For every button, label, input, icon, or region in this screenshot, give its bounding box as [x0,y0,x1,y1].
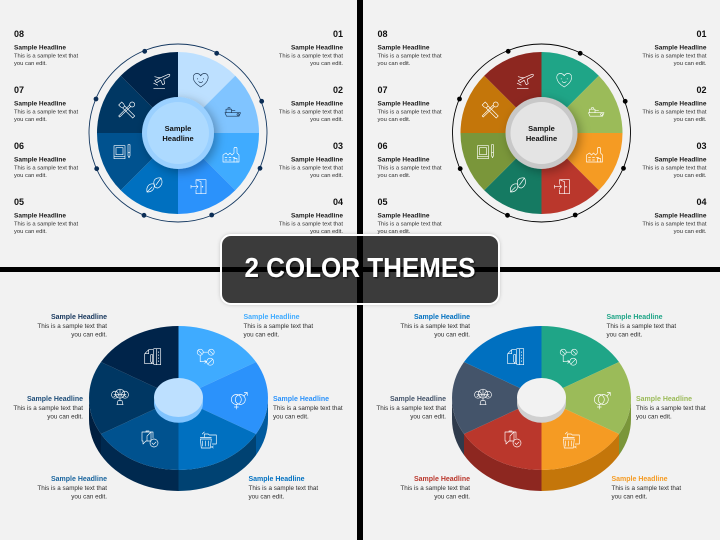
centre disc: Sample [165,124,191,133]
label top right: This is a sample text that [244,323,313,330]
item 03: Sample Headline [654,156,707,164]
item 02: you can edit. [674,117,707,123]
label middle right: Sample Headline [273,396,329,403]
centre disc [142,97,214,169]
item 04: you can edit. [674,229,707,235]
icon: factory [223,147,239,162]
raised hub [517,378,566,423]
icon: chat check [142,431,158,447]
outer ring with dots [89,44,267,222]
item 03: Sample Headline [291,156,343,164]
label top left: This is a sample text that [37,323,107,330]
icon: plane [154,74,170,89]
item 06: This is a sample text that [14,165,79,171]
centre disc: Headline [526,134,557,143]
item 05: you can edit. [378,229,411,235]
label middle left: Sample Headline [390,396,446,403]
item 01: Sample Headline [291,44,343,52]
horizontal divider [0,267,720,272]
item 04: you can edit. [310,229,343,235]
centre disc [506,97,578,169]
label top left: you can edit. [434,332,470,338]
label bottom right [612,476,681,500]
label middle right: you can edit. [636,414,672,420]
item 07: This is a sample text that [378,109,442,115]
label top left [37,314,107,338]
label middle left: you can edit. [410,414,446,420]
label bottom left [400,476,470,500]
label bottom left: Sample Headline [51,476,107,483]
item 02: 02 [696,85,706,95]
pie of eight segments [460,52,622,214]
icon: plane [517,74,533,89]
3D pie side walls [452,398,631,491]
label middle right: Sample Headline [636,396,692,403]
label bottom left: you can edit. [434,494,470,500]
item 08: Sample Headline [378,44,430,52]
item 08: 08 [14,29,24,39]
badge backing [221,235,499,304]
icon: heart [557,74,572,87]
item 02 [279,85,343,123]
item 04 [642,197,707,235]
icon: factory [586,147,602,162]
item 02: Sample Headline [291,100,343,108]
item 03: you can edit. [310,173,343,179]
item 08: This is a sample text that [14,53,79,59]
icon: leaves [147,178,162,192]
label bottom right: This is a sample text that [612,485,681,492]
item 02: This is a sample text that [642,109,707,115]
label top right: Sample Headline [606,314,663,321]
item 07: 07 [378,85,388,95]
item 06: This is a sample text that [378,165,442,171]
item 07: you can edit. [14,117,47,123]
icon: ship [588,108,604,116]
item 06: 06 [14,141,24,151]
item 03: This is a sample text that [642,165,707,171]
panel: blue radial chart with eight items [14,29,343,235]
icon: tree [474,389,492,405]
label bottom left: This is a sample text that [37,485,107,492]
item 03: 03 [333,141,343,151]
label bottom right: you can edit. [612,494,647,500]
item 07 [378,85,442,123]
item 06: 06 [378,141,388,151]
item 06: Sample Headline [14,156,66,164]
item 08 [14,29,79,67]
item 04 [279,197,343,235]
3D pie side walls [89,398,268,491]
item 07: This is a sample text that [14,109,79,115]
item 05: Sample Headline [378,212,430,220]
icon: door [191,180,206,194]
label bottom left: Sample Headline [414,476,470,483]
label top left: This is a sample text that [400,323,470,330]
item 01: Sample Headline [654,44,707,52]
item 04: 04 [696,197,706,207]
label middle right: This is a sample text that [273,405,343,412]
pie of eight segments [97,52,259,214]
item 06 [14,141,79,179]
label top right [606,314,676,338]
label top right: Sample Headline [244,314,300,321]
item 01: This is a sample text that [642,53,707,59]
label top left: Sample Headline [414,314,470,321]
item 05: 05 [378,197,388,207]
icon: documents [145,349,161,365]
item 08: you can edit. [14,61,47,67]
label top right: you can edit. [606,332,642,338]
label top left: Sample Headline [51,314,107,321]
item 07: you can edit. [378,117,411,123]
panel: multicolor radial chart with eight items [378,29,707,235]
item 04: 04 [333,197,343,207]
item 05: This is a sample text that [378,221,442,227]
label middle right [636,396,706,420]
icon: book [114,145,130,159]
icon: tree [112,389,128,405]
item 07: 07 [14,85,24,95]
item 01: This is a sample text that [279,53,343,59]
label bottom left: you can edit. [71,494,107,500]
raised hub [154,378,203,423]
label top left [400,314,470,338]
item 06: Sample Headline [378,156,430,164]
label middle left: Sample Headline [27,396,83,403]
icon: bins and folder [563,432,579,448]
label bottom left: This is a sample text that [400,485,470,492]
icon: gender symbols [231,392,247,409]
label bottom right [248,476,318,500]
item 08 [378,29,442,67]
item 03 [642,141,707,179]
item 01: 01 [696,29,706,39]
label bottom right: you can edit. [248,494,284,500]
label middle left: you can edit. [47,414,83,420]
item 02: This is a sample text that [279,109,343,115]
item 08: 08 [378,29,388,39]
item 01: you can edit. [310,61,343,67]
label middle left: This is a sample text that [13,405,83,412]
item 01 [279,29,343,67]
icon: gender symbols [594,392,610,409]
label middle right: you can edit. [273,414,309,420]
vertical divider [357,0,363,540]
panel: multicolor 3D pie chart with six items [376,314,706,500]
item 06 [378,141,442,179]
label bottom right: This is a sample text that [248,485,318,492]
label bottom left [37,476,107,500]
label top right [244,314,313,338]
label top left: you can edit. [71,332,107,338]
label middle right: This is a sample text that [636,405,706,412]
item 03: This is a sample text that [279,165,343,171]
label top right: you can edit. [244,332,279,338]
icon: heart [193,74,208,87]
title: 2 COLOR THEMES: 2 COLOR THEMES [244,252,476,283]
item 01: 01 [333,29,343,39]
centre disc: Sample [528,124,555,133]
outer ring with dots [452,44,630,222]
item 05: you can edit. [14,229,47,235]
item 02 [642,85,707,123]
item 05: 05 [14,197,24,207]
item 04: This is a sample text that [642,221,707,227]
item 07 [14,85,79,123]
item 03 [279,141,343,179]
icon: ship [225,108,240,116]
item 05 [378,197,442,235]
label middle left [13,396,83,420]
item 02: 02 [333,85,343,95]
icon: bins and folder [200,432,216,448]
item 08: Sample Headline [14,44,66,52]
label middle left [376,396,446,420]
item 02: you can edit. [310,117,343,123]
item 06: you can edit. [378,173,411,179]
item 04: Sample Headline [291,212,343,220]
item 07: Sample Headline [14,100,66,108]
item 07: Sample Headline [378,100,430,108]
item 05: Sample Headline [14,212,66,220]
badge border [221,235,499,304]
item 05 [14,197,79,235]
3D pie top segments [89,326,268,470]
item 08: This is a sample text that [378,53,442,59]
label bottom right: Sample Headline [612,476,668,483]
item 04: This is a sample text that [279,221,343,227]
item 01: you can edit. [674,61,707,67]
3D pie top segments [452,326,631,470]
icon: flow diagram [560,349,577,365]
panel: blue 3D pie chart with six items [13,314,343,500]
item 05: This is a sample text that [14,221,79,227]
centre disc: Headline [162,134,194,143]
icon: documents [508,349,524,365]
icon: leaves [510,178,526,192]
item 06: you can edit. [14,173,47,179]
icon: door [554,180,570,194]
label middle left: This is a sample text that [376,405,446,412]
item 04: Sample Headline [654,212,707,220]
icon: tools [119,102,135,118]
icon: flow diagram [197,349,214,365]
item 08: you can edit. [378,61,411,67]
item 03: 03 [696,141,706,151]
icon: tools [482,102,498,118]
item 03: you can edit. [674,173,707,179]
item 02: Sample Headline [654,100,707,108]
label middle right [273,396,343,420]
icon: chat check [505,431,521,447]
label top right: This is a sample text that [606,323,676,330]
label bottom right: Sample Headline [248,476,305,483]
icon: book [478,145,494,159]
item 01 [642,29,707,67]
